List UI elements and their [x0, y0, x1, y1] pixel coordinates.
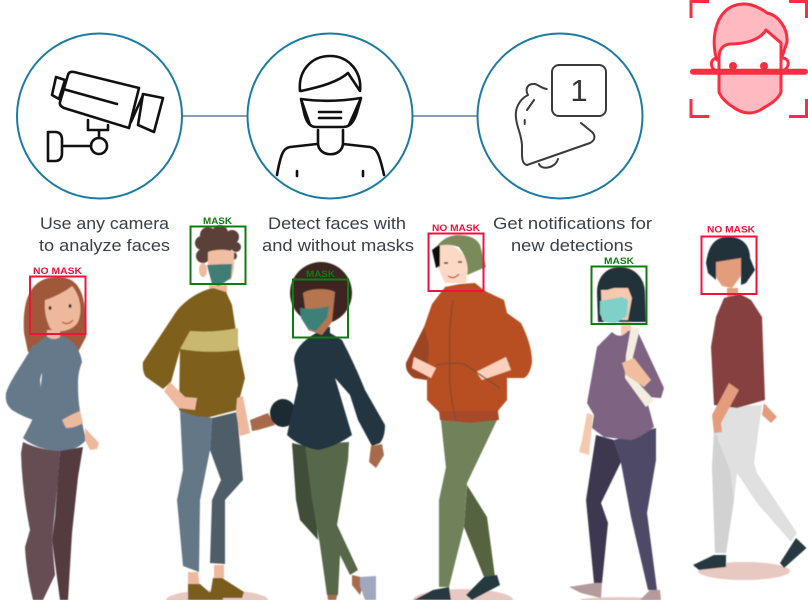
caption: camera [39, 214, 170, 255]
label: no mask box 6: NO MASK [707, 224, 755, 236]
caption: notifications: new detections [511, 236, 633, 255]
person 5: woman with mask and bag [569, 267, 664, 600]
label: mask box 5 [592, 256, 646, 324]
person 6: no mask man walking [693, 237, 806, 580]
icon: notification bell in circle: 1 [570, 73, 588, 108]
person 2: man with mask [143, 225, 268, 600]
caption: notifications: Get notifications for [493, 214, 652, 233]
label: mask box 3: MASK [306, 269, 335, 280]
person 3: woman with mask [250, 262, 385, 600]
label: mask box 2 [190, 216, 246, 284]
person 1: no mask woman [6, 277, 99, 600]
caption: notifications [493, 214, 652, 255]
caption: detect: Detect faces with [268, 214, 406, 233]
label: mask box 2: MASK [203, 216, 232, 227]
caption: detect: and without masks [262, 236, 414, 255]
icon: notification bell in circle [478, 34, 642, 198]
label: no mask box 4: NO MASK [432, 223, 480, 234]
caption: detect [262, 214, 414, 255]
icon: person wearing mask in circle [248, 34, 412, 198]
label: no mask box 1: NO MASK [33, 266, 82, 277]
person 4: no mask man in orange jacket [406, 235, 532, 600]
connector lines [182, 115, 478, 117]
icon: red face scan [691, 2, 806, 116]
label: mask box 5: MASK [604, 256, 634, 267]
label: no mask box 1 [30, 266, 86, 334]
caption: camera: Use any camera [40, 214, 170, 233]
icon: security camera in circle [17, 34, 182, 198]
label: mask box 3 [293, 269, 348, 338]
label: no mask box 6 [702, 224, 756, 294]
caption: camera: to analyze faces [39, 236, 170, 255]
label: no mask box 4 [428, 223, 484, 291]
